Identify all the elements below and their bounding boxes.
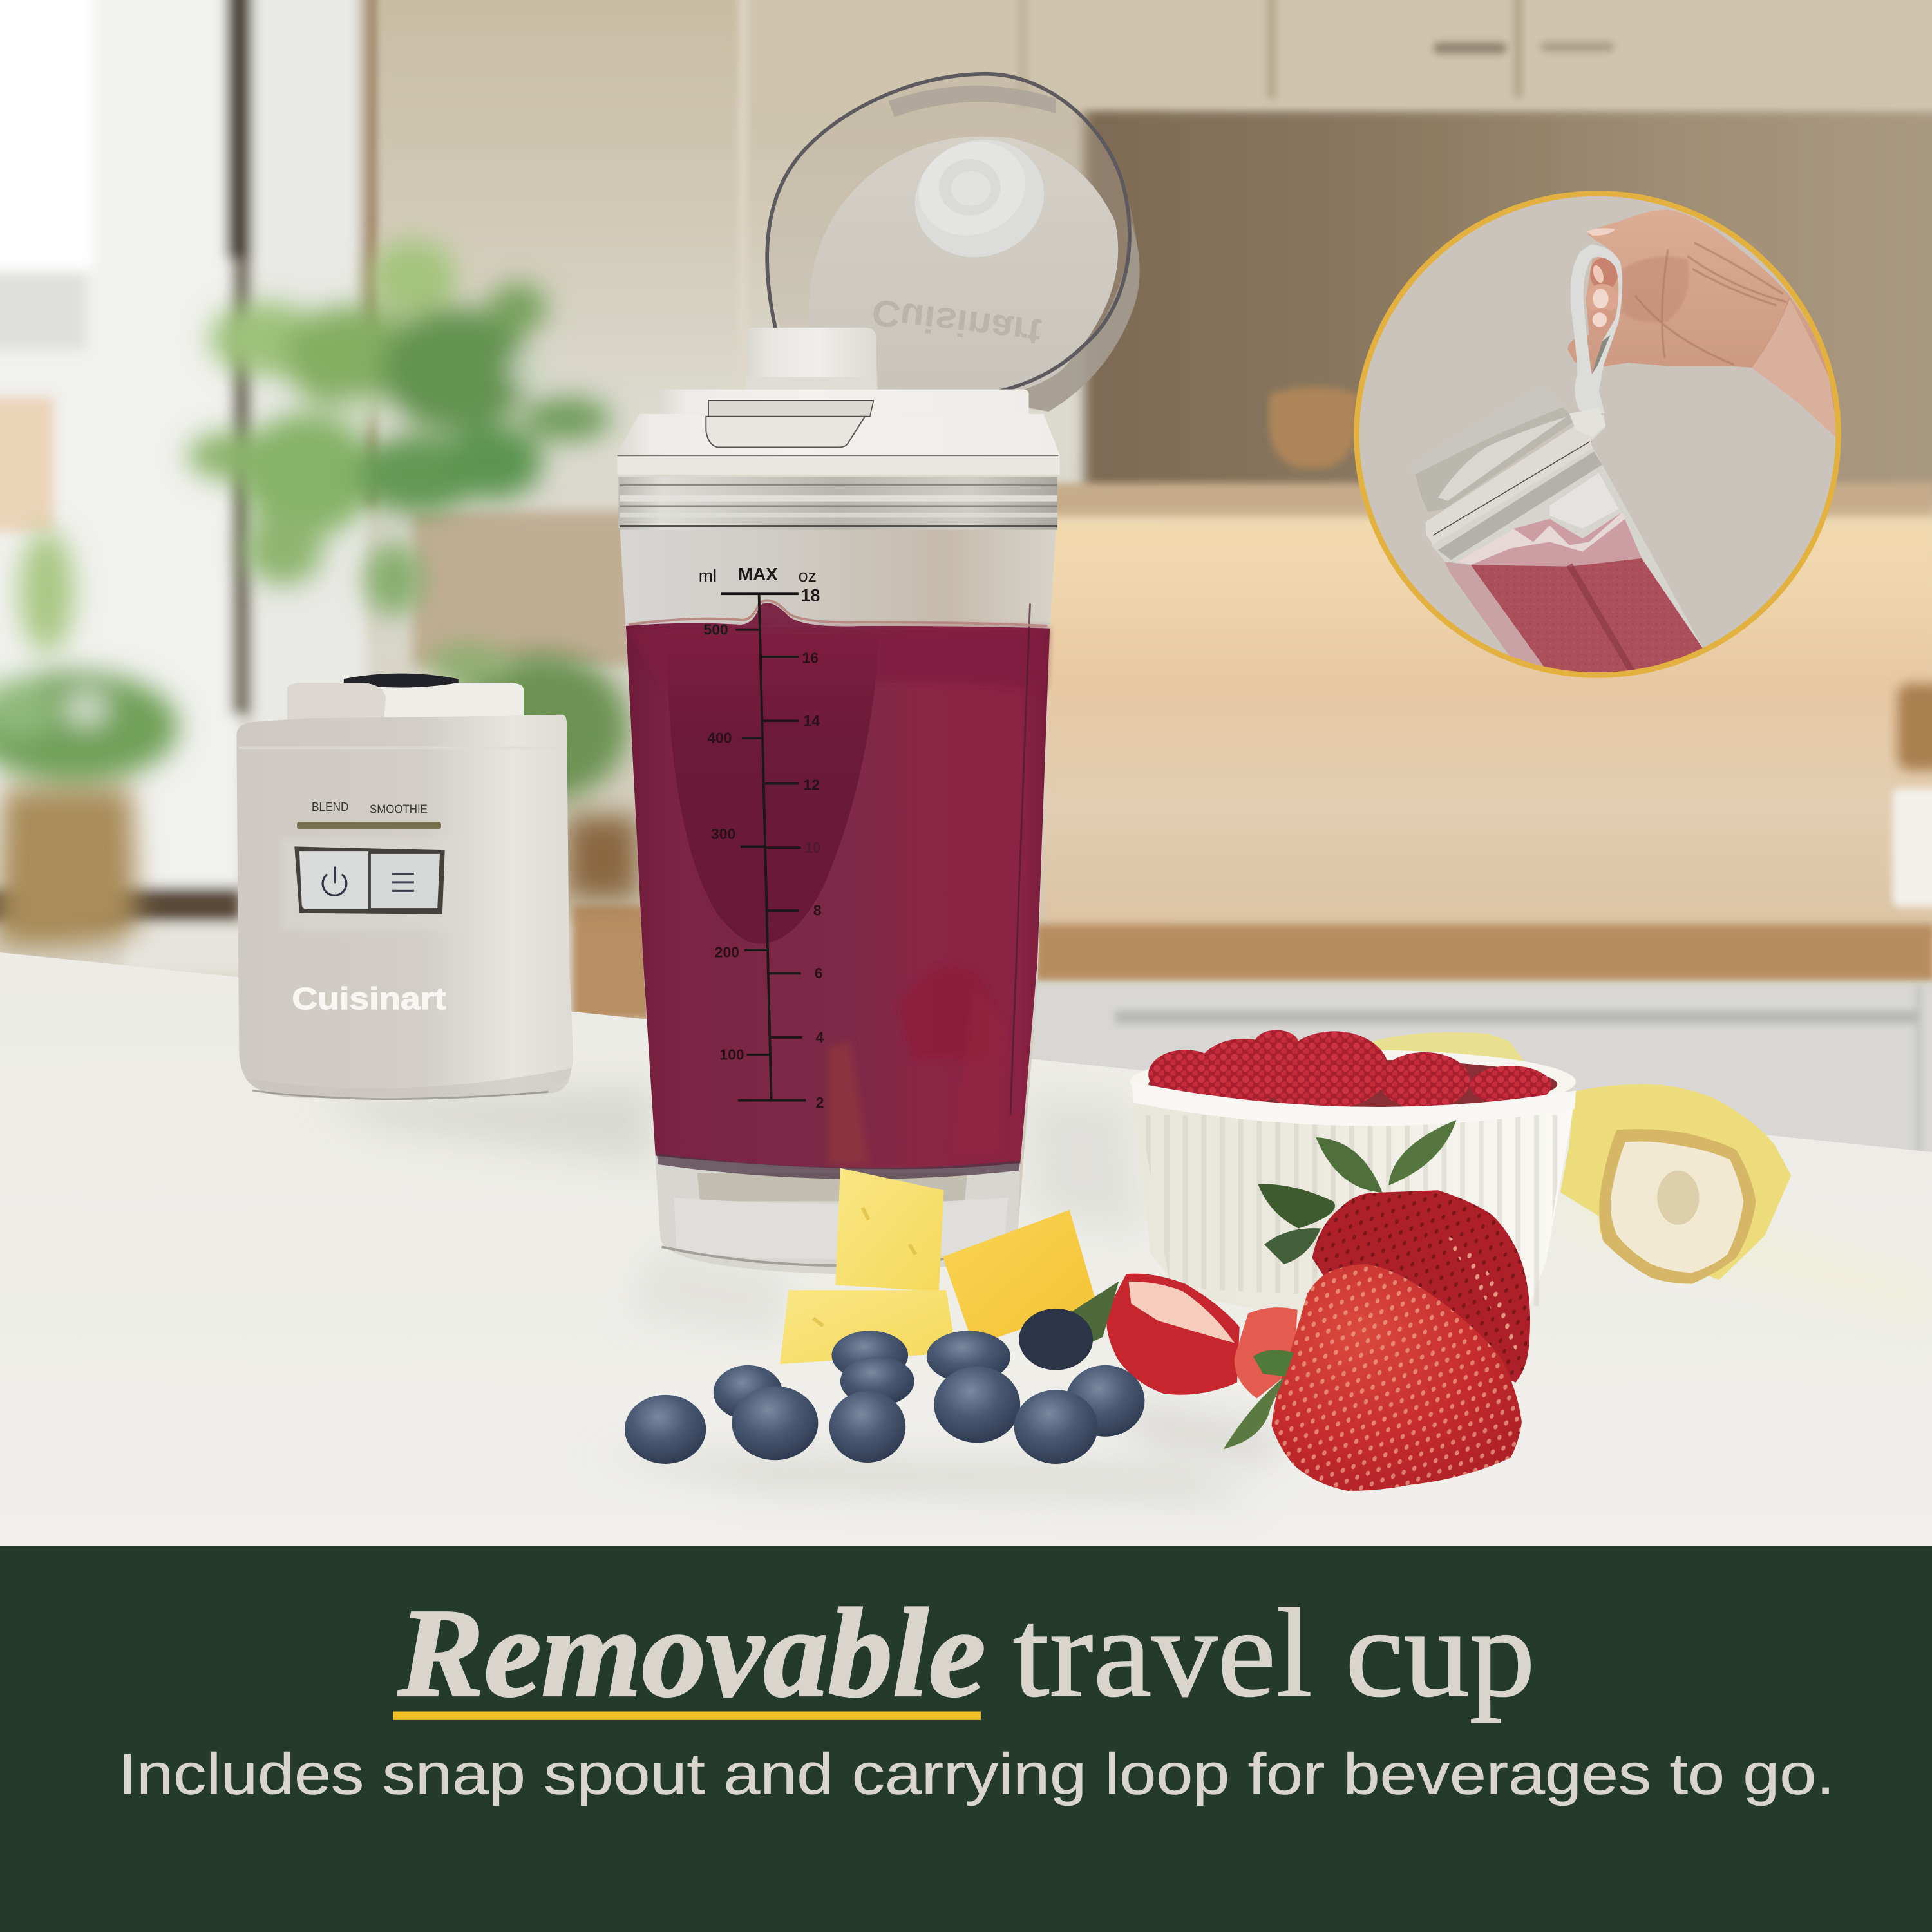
- inset photo contents: [1409, 210, 1839, 683]
- blueberries: [625, 1309, 1144, 1464]
- clear cup base: [656, 1153, 1020, 1274]
- control panel: [281, 838, 460, 931]
- back strawberry: [1312, 1190, 1530, 1383]
- scale numbers: oz: [799, 566, 817, 585]
- fingers: [1586, 258, 1618, 327]
- scale numbers: 300: [711, 826, 735, 842]
- plant behind cup: [426, 643, 638, 900]
- brown object at right edge: [1897, 684, 1932, 770]
- smoothie: [626, 600, 1050, 1169]
- inset backdrop: [1357, 194, 1838, 675]
- soft light and shadow bands on the counter: [320, 1084, 1932, 1501]
- scale numbers: 500: [703, 621, 728, 638]
- white item at right: [1893, 788, 1932, 907]
- inset ring: [1357, 193, 1839, 675]
- small halved strawberry: [1235, 1307, 1298, 1399]
- low shelf behind plant: [413, 511, 634, 665]
- white countertop: [0, 952, 1932, 1553]
- carrying loop: [1570, 245, 1622, 413]
- scale numbers: 14: [803, 712, 820, 729]
- loop hinge: [1569, 407, 1605, 437]
- shelf with bowl: [1047, 387, 1932, 520]
- brand logo: Cuisinart: [292, 982, 446, 1016]
- cut banana: [1562, 1086, 1789, 1284]
- silicone plug: [898, 122, 1061, 275]
- back wall: [379, 0, 1168, 924]
- collar lines: [1433, 442, 1590, 535]
- scale numbers: 2: [816, 1094, 824, 1111]
- heading: travel cup: travel cup: [1013, 1582, 1535, 1723]
- large plant: [187, 240, 611, 616]
- bottle dome lid: [1416, 407, 1573, 513]
- potted plant: [0, 530, 178, 947]
- travel cup with open lid: [616, 74, 1140, 1274]
- backsplash: [1041, 518, 1932, 931]
- pineapple chunks: [780, 1168, 1097, 1364]
- scale numbers: [699, 564, 824, 1111]
- snap tab: [708, 401, 874, 417]
- icon: power: [323, 867, 346, 895]
- banana behind bowl: [1357, 1032, 1524, 1061]
- inset circle: carrying loop: [1357, 193, 1839, 683]
- ramekin back rim: [1130, 1050, 1576, 1114]
- ramekin body: [1131, 1082, 1576, 1320]
- caption band: [0, 1546, 1932, 1932]
- scale numbers: 4: [816, 1029, 824, 1046]
- scale numbers: 100: [719, 1046, 744, 1063]
- scale numbers: MAX: [738, 564, 778, 584]
- scale lines: [721, 594, 806, 1101]
- subheading: Includes snap spout and carrying loop for beverages to go.: [118, 1743, 1835, 1807]
- ramekin interior: [1148, 1059, 1557, 1109]
- front strawberry: [1224, 1264, 1522, 1491]
- scale numbers: 8: [813, 902, 822, 919]
- indicator bar: [297, 822, 441, 829]
- scale numbers: 400: [707, 730, 732, 746]
- scale numbers: 18: [801, 586, 820, 605]
- dark upper wall: [1084, 108, 1932, 503]
- upper cabinets: [739, 0, 1932, 505]
- bottle in inset: [1432, 446, 1704, 683]
- white lid: [616, 328, 1059, 475]
- scale numbers: ml: [699, 566, 717, 585]
- flip lid: [767, 74, 1140, 412]
- blender top collar: [287, 674, 524, 748]
- bowl of raspberries with bananas: [1130, 1030, 1789, 1320]
- hand: [1567, 210, 1839, 440]
- wooden worktop: [573, 905, 1932, 1019]
- leaves of back strawberry: [1258, 1120, 1456, 1264]
- strawberries: [1057, 1120, 1530, 1491]
- raspberries: [1148, 1030, 1551, 1109]
- smoothie label: SMOOTHIE: [370, 803, 428, 816]
- glass body above smoothie: [620, 527, 1056, 1271]
- blender motor base: [236, 674, 573, 1099]
- scale numbers: 16: [802, 649, 819, 666]
- halved strawberry: [1057, 1274, 1240, 1395]
- measurement scale: [699, 564, 824, 1111]
- spout knob: [746, 328, 877, 390]
- scale numbers: 200: [715, 944, 739, 961]
- mirrored embossed logo: Cuisinart: [869, 291, 1043, 353]
- lower cabinets: [1029, 985, 1932, 1171]
- threaded collar: [618, 477, 1057, 530]
- blender body: [236, 715, 573, 1098]
- mode labels: BLEND: [312, 800, 348, 813]
- heading: Removable: Removable: [397, 1582, 986, 1723]
- yellow underline: [393, 1712, 981, 1720]
- bottle collar: [1425, 414, 1605, 544]
- icon: menu: [392, 874, 414, 891]
- scale numbers: 6: [815, 965, 822, 981]
- blurred kitchen background: [0, 0, 1932, 1171]
- scale numbers: 12: [803, 776, 820, 793]
- scale numbers: 10: [804, 839, 821, 856]
- window on the left: [0, 0, 382, 973]
